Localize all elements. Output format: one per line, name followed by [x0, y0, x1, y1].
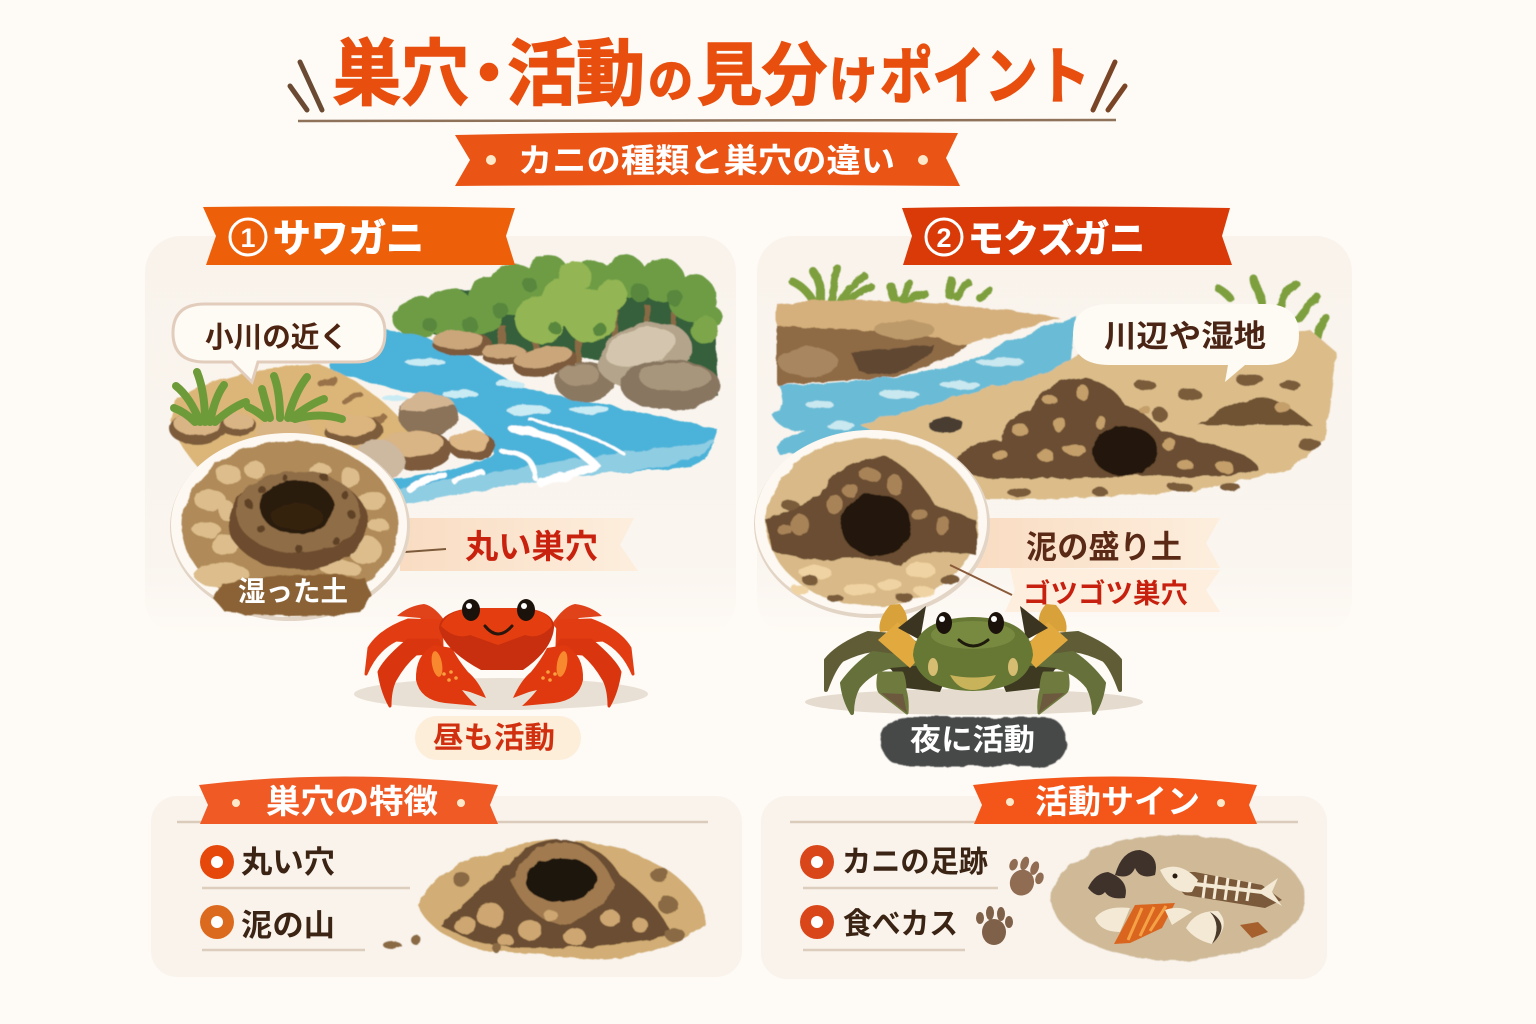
pill: active at night — [881, 717, 1067, 766]
illustration: wetland — [772, 268, 1336, 500]
ribbon: second crab: 2 — [936, 223, 952, 253]
magnifier: mud burrow — [754, 430, 1012, 618]
icon: paw print — [976, 906, 1013, 945]
title: の — [648, 55, 693, 107]
heading: activity signs — [973, 776, 1257, 824]
magnifier: round burrow — [170, 433, 410, 621]
panel: activity signs — [761, 776, 1327, 979]
illustration: tracks and fish scraps — [1051, 835, 1305, 961]
ribbon: second crab — [902, 206, 1232, 265]
crab: red freshwater crab — [354, 599, 648, 710]
far bank — [777, 318, 968, 385]
far stones — [432, 313, 720, 410]
bubble: near the brook — [173, 304, 385, 382]
divider — [177, 821, 708, 823]
ribbon: first crab — [203, 206, 515, 265]
heading: activity signs: 活動サイン — [1035, 783, 1200, 820]
panel: right habitat — [757, 236, 1352, 636]
bubble: riverside and marsh — [1073, 304, 1299, 382]
mud mound — [950, 378, 1258, 479]
item: food scraps: 食べカス — [843, 908, 958, 941]
title: ポイント — [880, 43, 1090, 112]
ribbon: round burrow: 丸い巣穴 — [465, 528, 598, 565]
item: crab tracks: カニの足跡 — [842, 846, 988, 879]
illustration: mountain stream — [169, 255, 722, 506]
subtitle ribbon: カニの種類と巣穴の違い — [518, 142, 895, 179]
heading: burrow features: 巣穴の特徴 — [266, 783, 438, 820]
label: wet soil: 湿った土 — [238, 576, 348, 607]
bubble: near the brook: 小川の近く — [205, 321, 348, 354]
ribbon: first crab: サワガニ — [273, 218, 424, 261]
ribbon: rugged burrow: ゴツゴツ巣穴 — [1023, 578, 1188, 609]
wet river — [772, 315, 1075, 455]
forest — [393, 255, 722, 400]
title accents right — [1093, 62, 1125, 110]
item: round hole — [200, 845, 335, 880]
item: mud mound: 泥の山 — [241, 908, 335, 943]
title — [333, 35, 1090, 115]
pill: active by day: 昼も活動 — [433, 722, 555, 755]
title: 活動 — [507, 35, 645, 115]
item: food scraps — [800, 905, 958, 941]
icon: paw print — [1001, 852, 1049, 901]
label: wet soil — [213, 575, 372, 616]
panel: burrow features — [151, 776, 742, 977]
far grass — [792, 268, 1326, 338]
title: け — [829, 53, 877, 109]
heading: burrow features — [199, 776, 498, 824]
bubble: riverside and marsh: 川辺や湿地 — [1104, 319, 1266, 354]
bank stones — [169, 393, 496, 484]
crab: mitten crab — [805, 604, 1143, 715]
title: 巣穴 — [333, 35, 469, 115]
small mound — [1198, 398, 1312, 425]
mud flat — [860, 330, 1336, 500]
title: ・ — [456, 37, 522, 111]
subtitle ribbon — [455, 132, 960, 186]
pill: active by day — [415, 716, 581, 760]
ribbon: second crab: モクズガニ — [968, 218, 1145, 261]
ribbon: mud mound: 泥の盛り土 — [1026, 529, 1182, 565]
ribbon: mud mound — [975, 518, 1220, 568]
item: round hole: 丸い穴 — [241, 845, 335, 880]
pill: active at night: 夜に活動 — [910, 724, 1035, 757]
ribbon: round burrow — [400, 518, 638, 571]
near bank — [170, 365, 425, 480]
grass left — [174, 372, 342, 422]
illustration: mound with hole — [383, 840, 706, 960]
title: 見分 — [697, 38, 827, 114]
divider — [790, 821, 1298, 823]
title accents left — [290, 62, 322, 110]
ribbon: rugged burrow — [1005, 568, 1220, 612]
panel: left habitat — [145, 236, 736, 636]
item: mud mound — [200, 905, 335, 943]
title underline — [298, 120, 1116, 121]
ribbon: first crab: 1 — [240, 223, 256, 253]
river — [330, 330, 716, 505]
mud stones — [1008, 374, 1322, 498]
